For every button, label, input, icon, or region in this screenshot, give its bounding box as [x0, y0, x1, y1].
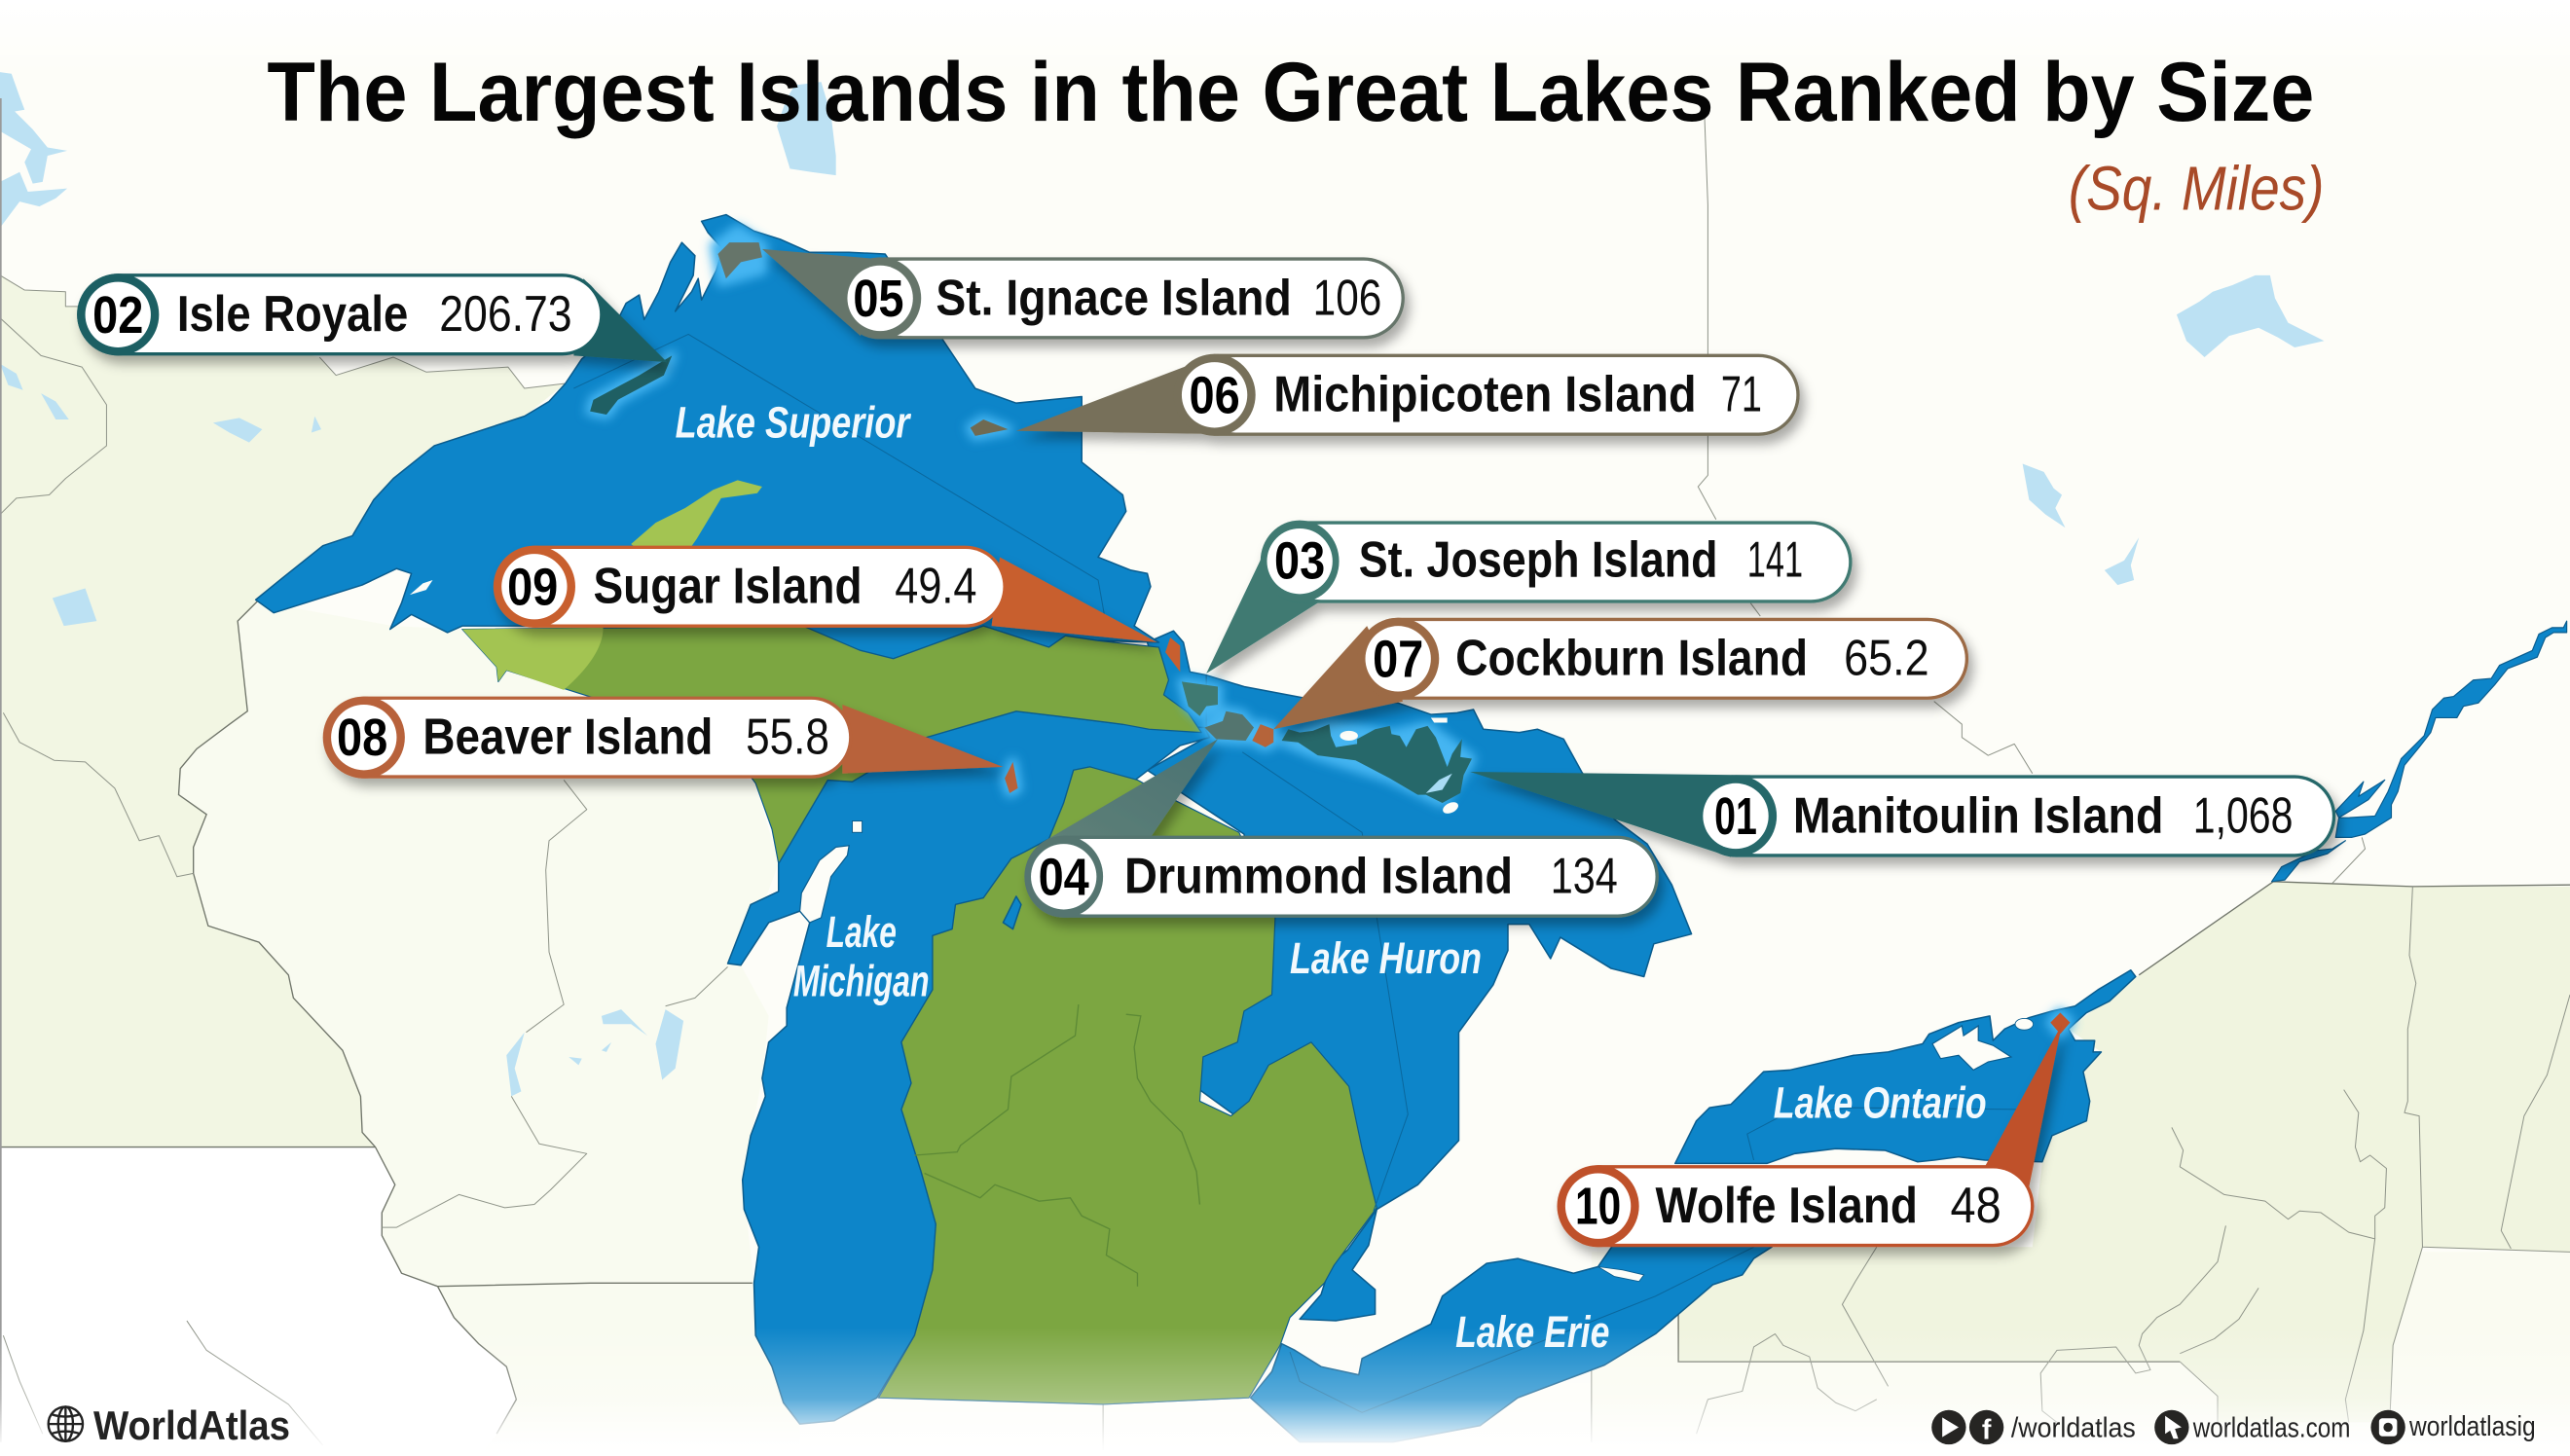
- top fade: [0, 0, 2570, 74]
- island: Beaver: [1005, 762, 1018, 793]
- callout 08 Beaver Island: 55.8: [746, 709, 829, 765]
- callout 08 Beaver Island: [323, 697, 1003, 779]
- bottom fade: [0, 1328, 2570, 1456]
- callout 09 Sugar Island: Sugar Island: [593, 559, 863, 615]
- island: Manitoulin: [1282, 724, 1472, 803]
- island: Long Point: [1598, 1266, 1644, 1282]
- footer: social handles: worldatlasig: [2408, 1411, 2536, 1442]
- inland lakes: [0, 72, 2324, 1096]
- water boundaries and county lines: [573, 334, 2016, 1412]
- lake name: Lake Michigan: [793, 907, 930, 1006]
- island: Sugar: [1165, 637, 1180, 672]
- icon: facebook: [1969, 1410, 2003, 1445]
- callout 02 Isle Royale: 206.73: [439, 286, 572, 343]
- lake name: Lake Michigan: Lake: [826, 907, 897, 957]
- footer: social handles: /worldatlas: [2011, 1413, 2136, 1444]
- land: Keweenaw peninsula: [631, 480, 762, 551]
- icon: instagram: [2370, 1410, 2405, 1444]
- callout 02 Isle Royale: Isle Royale: [177, 286, 408, 343]
- callout 03 St. Joseph Island: 03: [1274, 531, 1325, 590]
- island: Isle Royale: [590, 355, 672, 415]
- callout 09 Sugar Island: 09: [507, 558, 558, 616]
- lake name: Lake Michigan: Michigan: [793, 957, 930, 1006]
- callout 02 Isle Royale: [77, 273, 667, 362]
- callout 01 Manitoulin Island: [1470, 772, 2335, 857]
- callout 10 Wolfe Island: [1557, 1024, 2062, 1247]
- callout 07 Cockburn Island: 07: [1373, 630, 1423, 688]
- callout 07 Cockburn Island: [1273, 618, 1968, 729]
- callout 03 St. Joseph Island: St. Joseph Island: [1359, 532, 1717, 589]
- island: St. Ignace: [717, 242, 762, 278]
- callout 06 Michipicoten Island: [1016, 354, 1800, 436]
- callout 08 Beaver Island: 08: [337, 709, 387, 767]
- land: lower Michigan peninsula: [878, 767, 1377, 1404]
- subtitle: unit: (Sq. Miles): [2069, 154, 2324, 224]
- footer: social handles: [1931, 1410, 2536, 1445]
- lake: St Clair: [1300, 1210, 1377, 1321]
- callout 01 Manitoulin Island: 01: [1714, 787, 1757, 846]
- callout 04 Drummond Island: Drummond Island: [1124, 849, 1513, 905]
- lake: Ontario: [1675, 970, 2136, 1163]
- bay: Grand Traverse: [1003, 896, 1021, 929]
- logo: WorldAtlas: WorldAtlas: [93, 1402, 290, 1448]
- island: Amherst: [2015, 1018, 2034, 1030]
- land: Prince Edward peninsula: [1932, 1026, 2011, 1070]
- land: Door peninsula: [800, 846, 849, 923]
- lake: Michigan: [728, 711, 1210, 1424]
- callout 04 Drummond Island: 134: [1551, 849, 1618, 905]
- callout 06 Michipicoten Island: 71: [1721, 367, 1762, 423]
- island: Washington: [853, 821, 863, 832]
- river: St Lawrence: [2272, 621, 2567, 882]
- callout 03 St. Joseph Island: [1206, 521, 1853, 673]
- lake name: Lake Huron: Lake Huron: [1290, 933, 1482, 983]
- callout 05 St. Ignace Island: St. Ignace Island: [936, 270, 1292, 326]
- lake: Erie: [1251, 1229, 1772, 1442]
- island: Wolfe: [2050, 1013, 2070, 1034]
- island: Drummond: [1205, 711, 1254, 741]
- callout 06 Michipicoten Island: 06: [1190, 366, 1240, 424]
- icon: play: [1931, 1410, 1966, 1444]
- icon: globe: [49, 1406, 83, 1441]
- island: Cockburn: [1252, 724, 1273, 747]
- footer: social handles: worldatlas.com: [2192, 1413, 2350, 1444]
- callout 10 Wolfe Island: 10: [1575, 1178, 1621, 1236]
- island: Madeline: [410, 580, 432, 595]
- island: Michipicoten: [971, 419, 1008, 436]
- lake name: Lake Erie: Lake Erie: [1455, 1307, 1609, 1357]
- callout 09 Sugar Island: [494, 546, 1157, 642]
- icon: facebook: f: [1982, 1414, 1992, 1445]
- callout 09 Sugar Island: 49.4: [895, 559, 976, 615]
- callout 02 Isle Royale: 02: [92, 286, 143, 345]
- callout 05 St. Ignace Island: [762, 249, 1405, 340]
- callout 06 Michipicoten Island: Michipicoten Island: [1273, 367, 1697, 423]
- callout 07 Cockburn Island: Cockburn Island: [1455, 631, 1808, 687]
- title: The Largest Islands in the Great Lakes Ranked by Size: [267, 46, 2314, 139]
- lake: Huron: [1148, 675, 1692, 1210]
- callout 07 Cockburn Island: 65.2: [1844, 631, 1929, 687]
- callout 01 Manitoulin Island: 1,068: [2193, 787, 2293, 844]
- callout 05 St. Ignace Island: 05: [853, 270, 904, 328]
- callout 04 Drummond Island: 04: [1039, 848, 1089, 906]
- island: St. Joseph: [1182, 681, 1218, 716]
- callout 01 Manitoulin Island: Manitoulin Island: [1793, 787, 2163, 844]
- lake: Superior: [256, 215, 1158, 659]
- icon: cursor: [2154, 1410, 2189, 1444]
- lake name: Lake Superior: Lake Superior: [676, 398, 911, 448]
- callout 03 St. Joseph Island: 141: [1747, 532, 1803, 589]
- land: upper Michigan peninsula: [462, 626, 1201, 863]
- lake: St Marys strait: [1148, 631, 1246, 741]
- callout 08 Beaver Island: Beaver Island: [422, 709, 713, 765]
- callout 05 St. Ignace Island: 106: [1313, 270, 1381, 326]
- Manitoulin lake details: [1340, 717, 1460, 816]
- island glow: [590, 230, 2070, 1034]
- callout 10 Wolfe Island: 48: [1951, 1178, 2001, 1234]
- land: western upper peninsula highlight: [462, 628, 604, 690]
- lake name: Lake Ontario: Lake Ontario: [1774, 1077, 1987, 1127]
- callout 10 Wolfe Island: Wolfe Island: [1656, 1178, 1918, 1234]
- callout 04 Drummond Island: [1024, 739, 1659, 918]
